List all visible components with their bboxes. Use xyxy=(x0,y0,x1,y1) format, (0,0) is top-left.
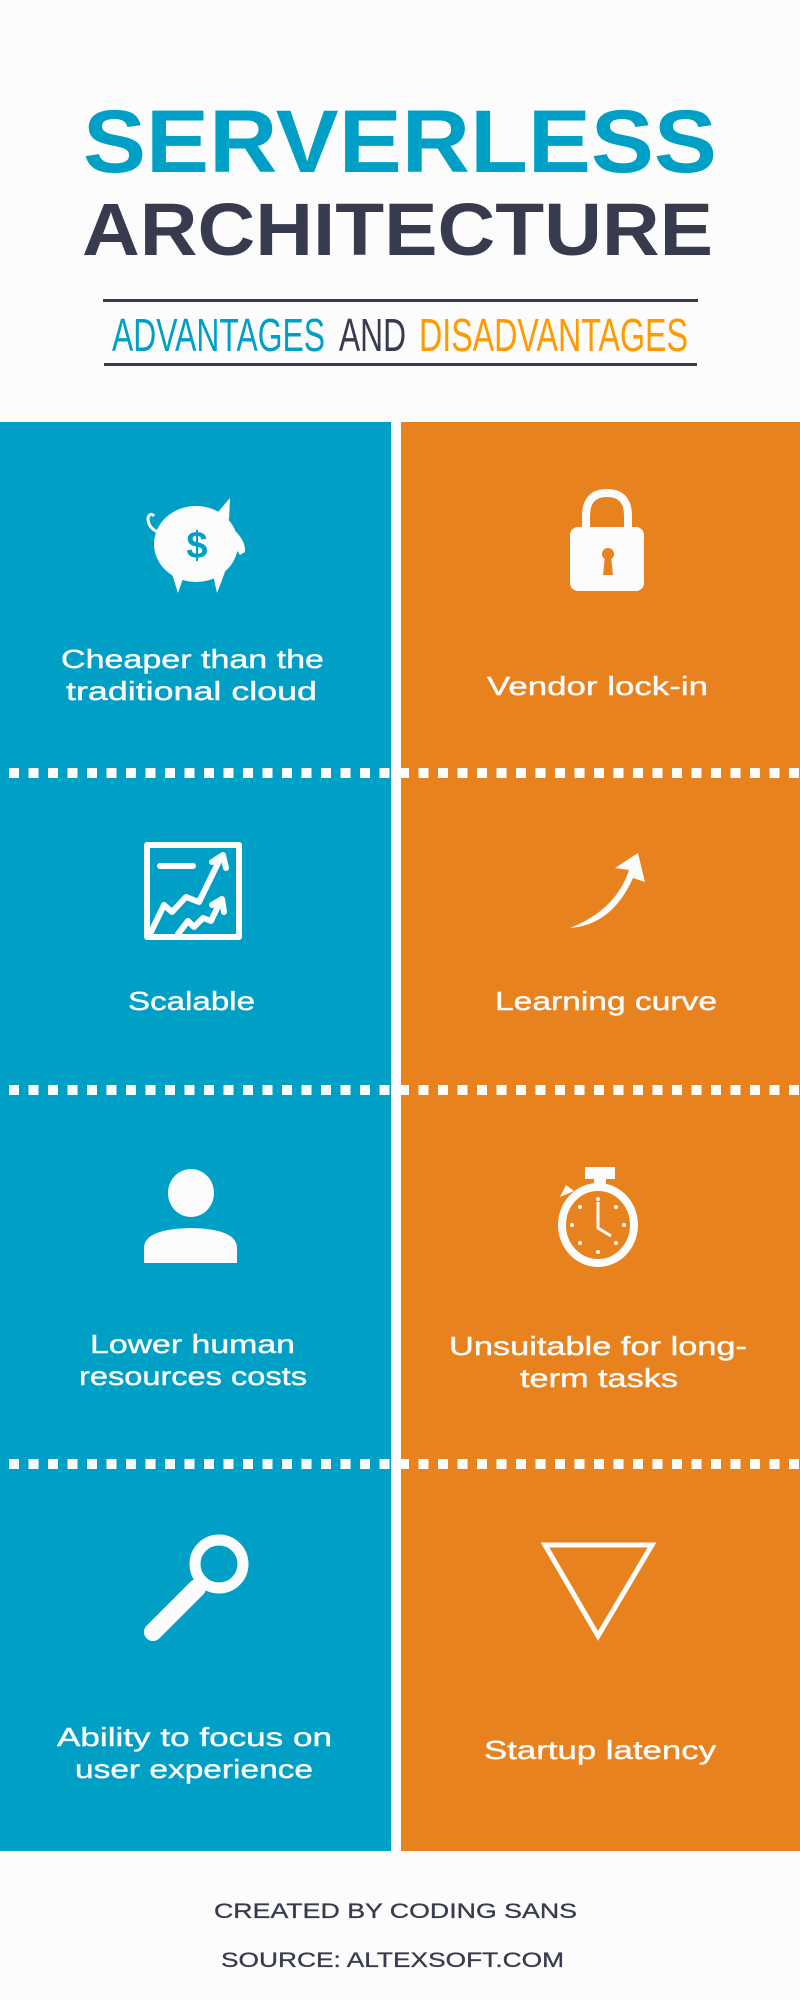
panel: advantages xyxy=(0,422,391,1851)
text: ability to focus: Ability to focus on xyxy=(57,1722,332,1752)
text: unsuitable: Unsuitable for long- xyxy=(449,1331,747,1361)
text: lower human resources costs: Lower human xyxy=(90,1329,295,1359)
subtitle: DISADVANTAGES xyxy=(419,309,688,361)
icon: person xyxy=(144,1169,237,1263)
subtitle xyxy=(103,299,698,366)
title: SERVERLESS xyxy=(83,91,717,191)
icon: piggy bank: $ xyxy=(186,525,208,567)
text: lower human resources costs xyxy=(79,1329,307,1391)
text: unsuitable: term tasks xyxy=(520,1363,678,1393)
footer: CREATED BY CODING SANS xyxy=(214,1900,577,1923)
icon: learning curve arrow xyxy=(570,853,645,928)
icon: magnifier xyxy=(153,1540,243,1632)
panel: disadvantages xyxy=(401,422,800,1851)
icon: piggy bank xyxy=(148,498,245,593)
footer xyxy=(214,1900,577,1972)
text: lower human resources costs: resources costs xyxy=(79,1361,307,1391)
icon: stopwatch xyxy=(560,1167,634,1263)
text: unsuitable xyxy=(449,1331,747,1393)
text: vendor lock-in: Vendor lock-in xyxy=(487,671,708,701)
title xyxy=(82,91,717,271)
footer: SOURCE: ALTEXSOFT.COM xyxy=(221,1949,564,1972)
text: cheaper: Cheaper than the xyxy=(61,644,324,674)
subtitle: AND xyxy=(339,309,406,361)
title: ARCHITECTURE xyxy=(82,188,713,271)
icon: chart xyxy=(147,845,239,937)
text: learning curve: Learning curve xyxy=(495,986,717,1016)
subtitle: ADVANTAGES xyxy=(112,309,325,361)
text: startup latency: Startup latency xyxy=(484,1735,716,1765)
icon: padlock xyxy=(570,493,644,591)
icon: triangle xyxy=(545,1545,652,1636)
text: cheaper xyxy=(61,644,324,706)
text: cheaper: traditional cloud xyxy=(66,676,317,706)
text: scalable: Scalable xyxy=(128,986,255,1016)
text: ability to focus xyxy=(57,1722,332,1784)
text: ability to focus: user experience xyxy=(75,1754,313,1784)
